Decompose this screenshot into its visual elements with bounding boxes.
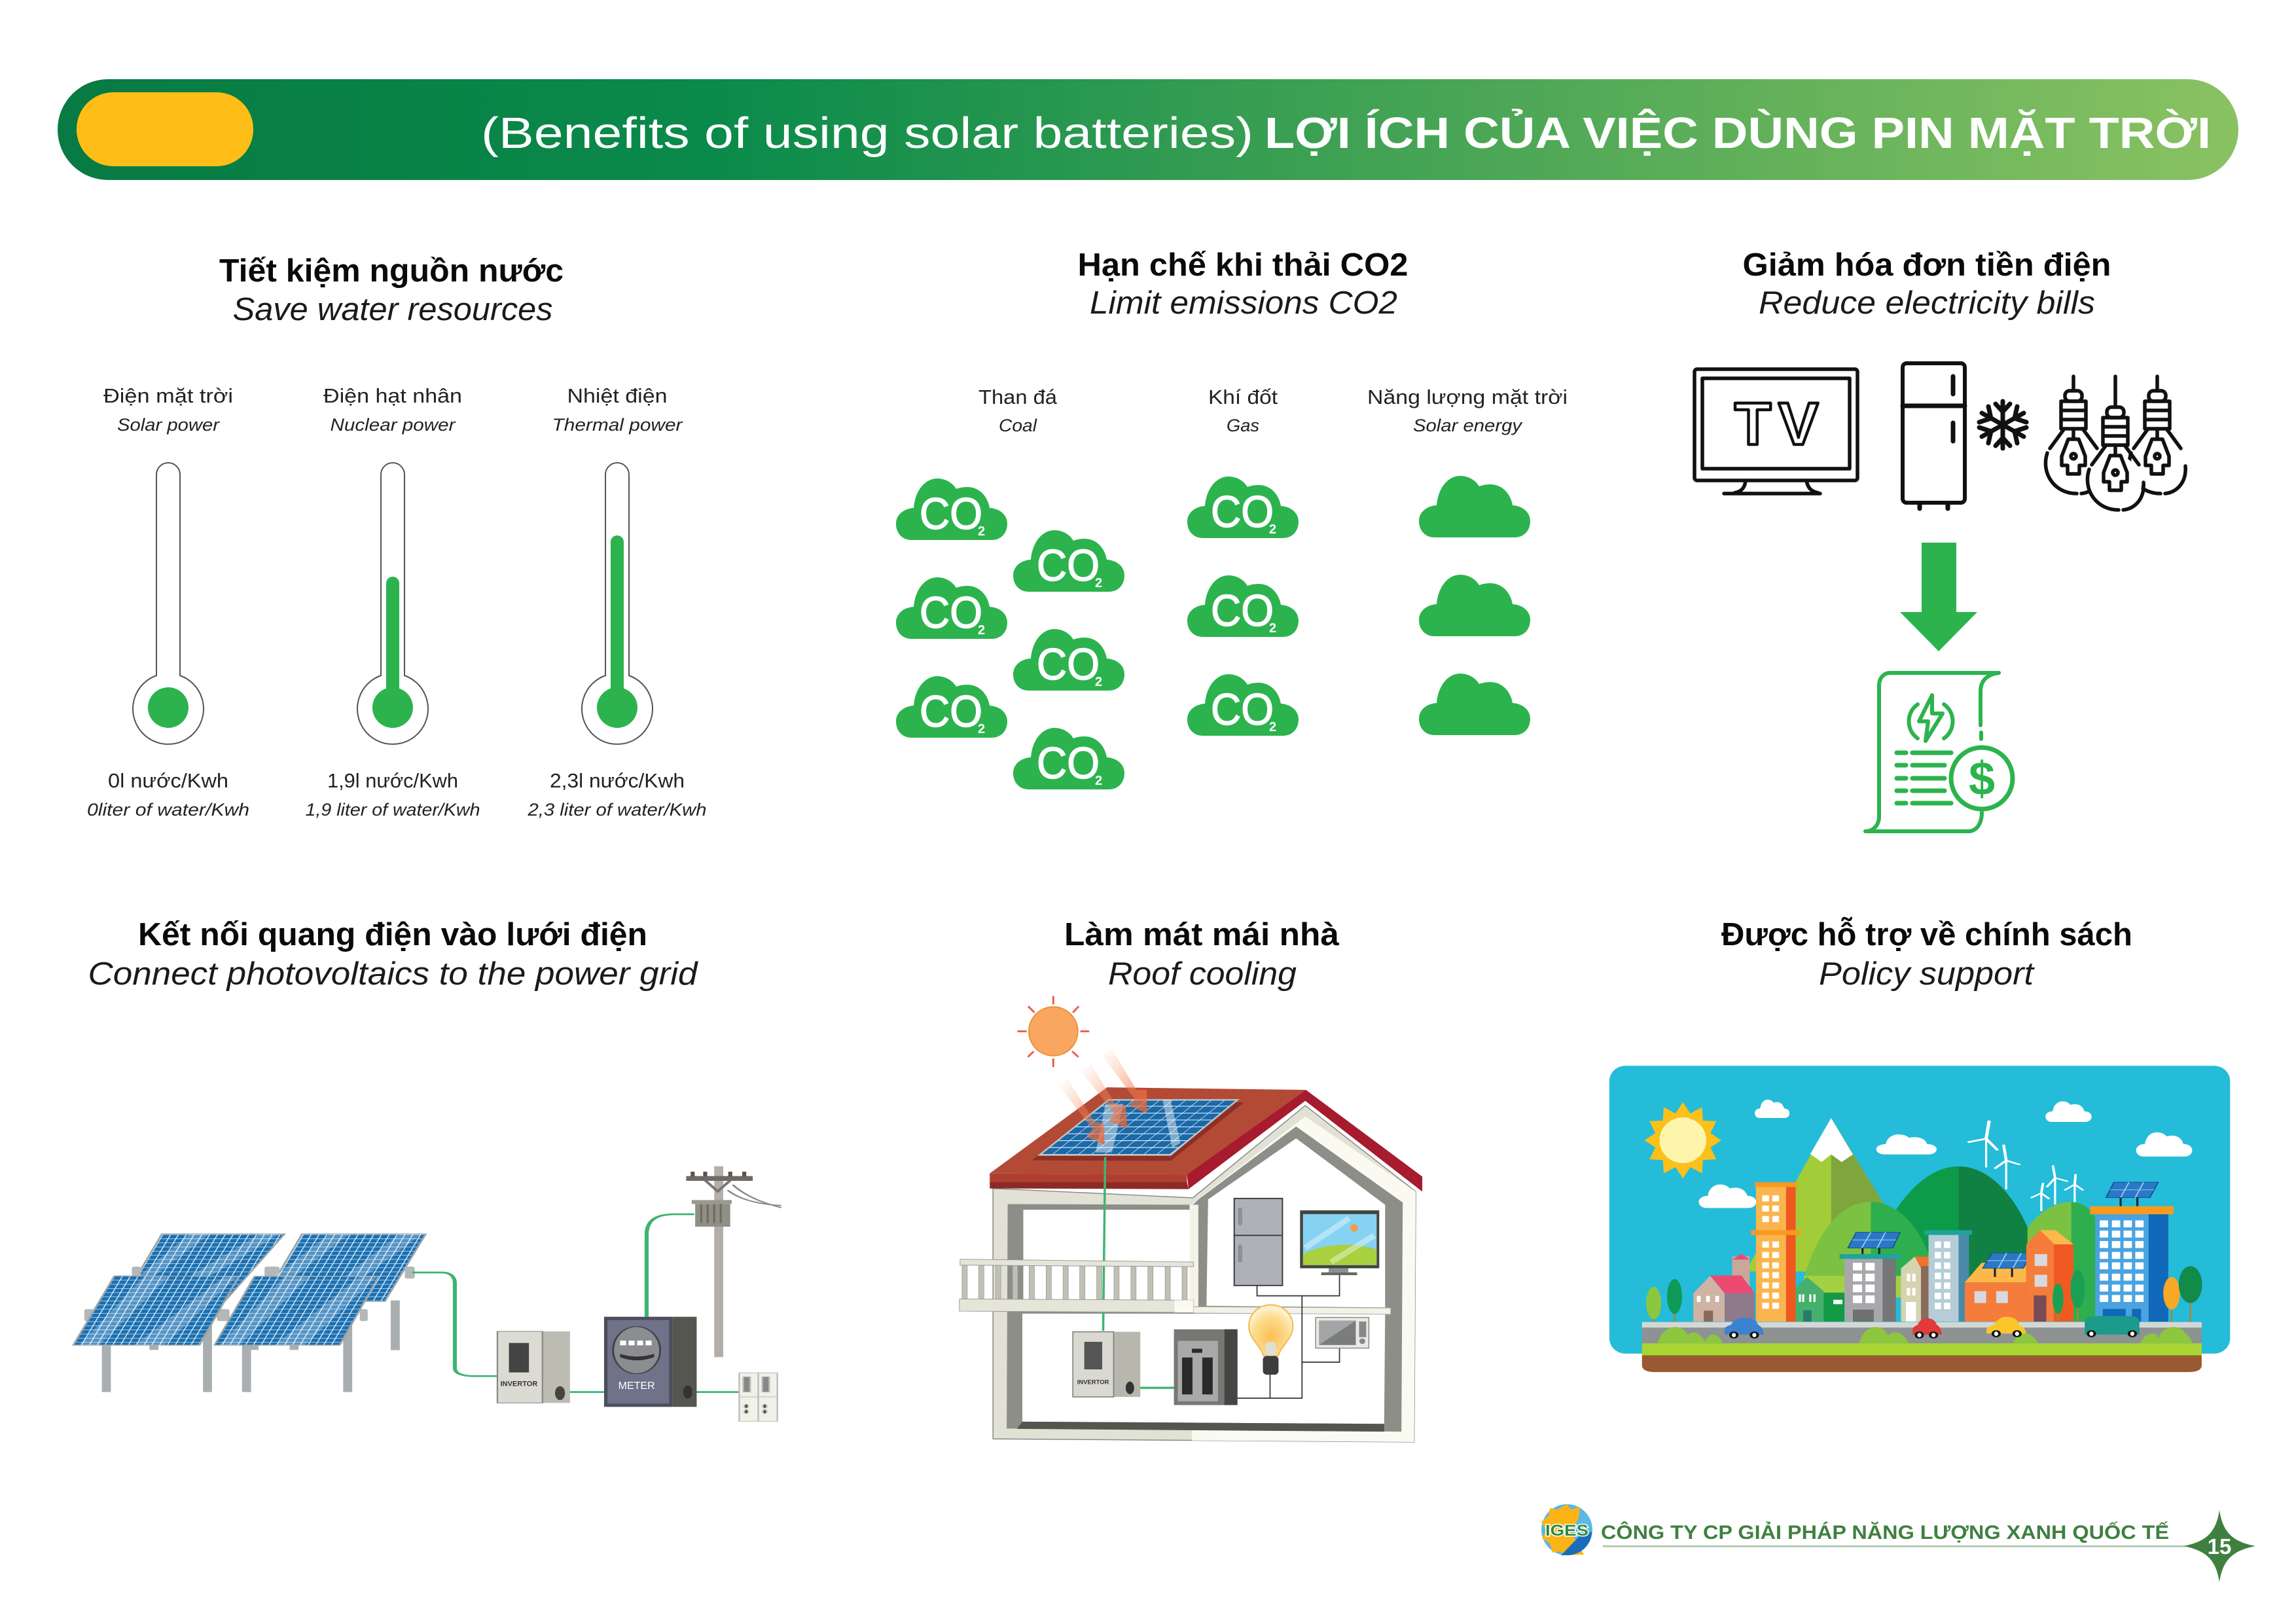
title: (Benefits of using solar batteries) [481, 109, 1253, 158]
panel reflections [1096, 1100, 1181, 1153]
road and ground [1642, 1322, 2202, 1372]
heading: Được hỗ trợ về chính sách [1721, 917, 2132, 952]
column labels: Gas [1227, 416, 1259, 435]
back legs [260, 1301, 400, 1350]
coal clouds: 2 [1095, 675, 1102, 689]
mountain [1746, 1118, 1896, 1271]
breaker box [1174, 1329, 1238, 1405]
panel: limit CO2 [896, 247, 1568, 789]
meter box: METER [619, 1380, 655, 1392]
icon: snowflake [1979, 401, 2026, 448]
fridge [1234, 1199, 1282, 1286]
cars [1725, 1316, 2140, 1338]
sun rays [1059, 1049, 1147, 1145]
sky [1609, 1066, 2230, 1354]
coal clouds: CO [920, 489, 982, 539]
column labels [978, 386, 1568, 435]
inverter box: INVERTOR [501, 1380, 537, 1388]
panel: connect photovoltaics [73, 917, 781, 1421]
coal clouds: 2 [1095, 576, 1102, 590]
solar clean clouds [1419, 476, 1530, 735]
thermometer: thermal: Nhiệt điện [567, 384, 668, 407]
wall switches [739, 1373, 778, 1421]
thermometer: solar: 0l nước/Kwh [108, 769, 228, 792]
orange tower [1751, 1182, 1801, 1322]
yellow pill [77, 92, 253, 166]
blue tower with solar panel [2090, 1182, 2174, 1322]
arrow: down [1900, 543, 1977, 651]
utility pole [686, 1166, 781, 1357]
subheading: Limit emissions CO2 [1090, 285, 1397, 321]
pink house [1693, 1254, 1755, 1322]
coal clouds: CO [920, 588, 982, 638]
coal clouds: 2 [978, 722, 985, 736]
clouds [1699, 1100, 2192, 1208]
title: LỢI ÍCH CỦA VIỆC DÙNG PIN MẶT TRỜI [1265, 109, 2211, 158]
icon: sun [1018, 996, 1089, 1067]
company name: CÔNG TY CP GIẢI PHÁP NĂNG LƯỢNG XANH QUỐC TẾ [1601, 1521, 2169, 1543]
logo [1541, 1504, 1592, 1555]
gas clouds: CO [1211, 586, 1274, 636]
trees [1646, 1266, 2202, 1322]
logo: IGES [1545, 1522, 1588, 1540]
thermometer: nuclear [305, 384, 480, 820]
panel: roof cooling [960, 917, 1422, 1442]
thermometer: thermal [527, 384, 707, 820]
icon: tv: T [1734, 391, 1771, 458]
orange tall house [2026, 1230, 2073, 1322]
green wire [1103, 1157, 1174, 1388]
hills [1800, 1166, 2098, 1322]
front legs [102, 1311, 352, 1392]
wind turbines [1969, 1121, 2083, 1210]
gas clouds: 2 [1269, 621, 1276, 636]
thermometer: solar [87, 384, 249, 820]
heading: Giảm hóa đơn tiền điện [1742, 247, 2111, 283]
grey building with solar panel [1840, 1233, 1901, 1322]
icon: fridge [1903, 363, 1965, 509]
bushes [1658, 1327, 2193, 1343]
back solar panels [122, 1234, 426, 1301]
roof [990, 1087, 1422, 1191]
microwave [1316, 1318, 1369, 1348]
panel: reduce electricity bills [1695, 247, 2185, 831]
column labels: Khí đốt [1208, 386, 1278, 408]
light bulb [1249, 1305, 1293, 1375]
illustration: house [960, 996, 1422, 1442]
icon: electricity bill: $ [1969, 753, 1995, 805]
header banner [58, 79, 2238, 180]
heading: Làm mát mái nhà [1064, 917, 1340, 952]
icon: three light bulbs [2045, 376, 2185, 513]
thermometer: solar: Solar power [117, 415, 220, 435]
column labels: Năng lượng mặt trời [1367, 386, 1568, 408]
tv [1300, 1210, 1379, 1275]
gas clouds [1187, 477, 1299, 736]
thermometer: solar: Điện mặt trời [103, 384, 233, 407]
thermometer: thermal: 2,3l nước/Kwh [550, 769, 685, 792]
orange low house with solar panel [1965, 1253, 2032, 1322]
thermometer: thermal: 2,3 liter of water/Kwh [527, 800, 707, 820]
column labels: Than đá [978, 386, 1058, 408]
coal clouds: CO [1037, 738, 1100, 788]
thermometer: nuclear: 1,9l nước/Kwh [327, 769, 458, 792]
column labels: Solar energy [1413, 416, 1523, 435]
footer [1541, 1504, 2255, 1582]
thermometer: thermal: Thermal power [552, 415, 683, 435]
page number star [2183, 1510, 2255, 1582]
heading: Tiết kiệm nguồn nước [219, 253, 564, 289]
coal clouds: 2 [1095, 774, 1102, 788]
thermometer: solar: 0liter of water/Kwh [87, 800, 249, 820]
roof solar panel [1039, 1100, 1238, 1155]
subheading: Roof cooling [1108, 956, 1297, 992]
coal clouds: CO [1037, 640, 1100, 689]
panel reflections [79, 1234, 422, 1345]
wiring [1238, 1274, 1340, 1398]
coal clouds: CO [920, 687, 982, 736]
green house [1791, 1277, 1844, 1322]
inverter [1073, 1332, 1140, 1397]
underline [1603, 1545, 2185, 1547]
panel: save water [87, 253, 707, 820]
sun [1645, 1102, 1721, 1178]
coal clouds: CO [1037, 541, 1100, 590]
thermometer: nuclear: 1,9 liter of water/Kwh [305, 800, 480, 820]
thermometer: nuclear: Nuclear power [330, 415, 456, 435]
front solar panels [73, 1276, 379, 1345]
coal clouds: 2 [978, 524, 985, 539]
heading: Kết nối quang điện vào lưới điện [138, 917, 647, 952]
balcony railing [960, 1259, 1193, 1312]
icon: tv [1695, 369, 1857, 494]
icon: electricity bill [1865, 673, 2013, 831]
teal building [1924, 1230, 1972, 1322]
green cables [412, 1214, 740, 1392]
house walls [993, 1106, 1416, 1442]
coal clouds: 2 [978, 623, 985, 638]
gas clouds: CO [1211, 487, 1274, 537]
page number star: 15 [2208, 1534, 2231, 1559]
column labels: Coal [999, 416, 1037, 435]
beige building [1901, 1257, 1929, 1322]
subheading: Policy support [1819, 956, 2036, 992]
subheading: Save water resources [233, 292, 552, 327]
mount joints [84, 1267, 415, 1321]
illustration: grid-tied system [73, 1166, 781, 1421]
meter box [604, 1317, 696, 1407]
inverter: INVERTOR [1077, 1379, 1109, 1386]
illustration: green city [1609, 1066, 2230, 1372]
thermometer: nuclear: Điện hạt nhân [323, 384, 462, 407]
gas clouds: CO [1211, 685, 1274, 734]
inverter box [497, 1331, 570, 1403]
icon: tv: V [1778, 391, 1818, 458]
heading: Hạn chế khi thải CO2 [1077, 247, 1408, 283]
subheading: Connect photovoltaics to the power grid [88, 956, 698, 992]
subheading: Reduce electricity bills [1759, 285, 2095, 321]
gas clouds: 2 [1269, 522, 1276, 537]
gas clouds: 2 [1269, 720, 1276, 734]
coal clouds [896, 478, 1124, 789]
panel: policy support [1609, 917, 2230, 1372]
